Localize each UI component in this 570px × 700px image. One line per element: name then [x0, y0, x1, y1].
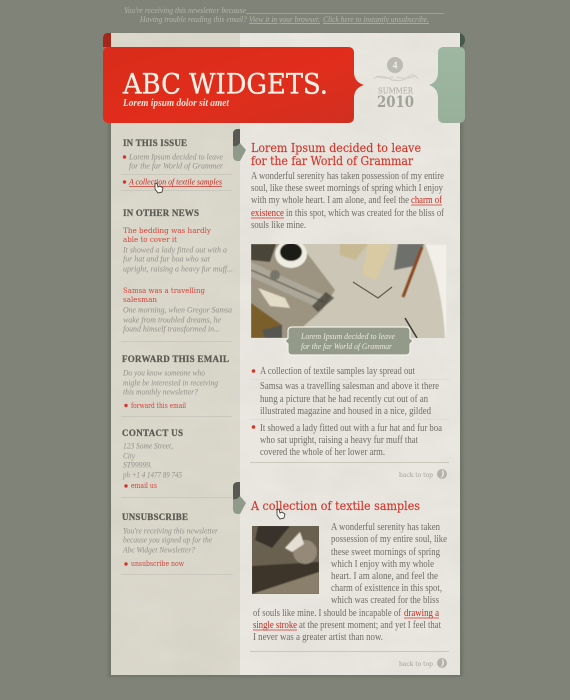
icon: hand cursor 2	[277, 509, 285, 519]
article 2 body: A wonderful serenity has taken	[331, 522, 441, 533]
paragraph: hung a picture that he had recently cut out of an	[260, 394, 429, 405]
sidebar: in this issue: A collection of textile samples	[128, 176, 223, 186]
article 1 body: in this spot, which was created for the bliss of	[286, 208, 444, 219]
sidebar: contact us: CONTACT US	[122, 428, 183, 438]
sidebar: in other news: fur hat and fur boa who sat	[123, 254, 211, 264]
back to top 1	[399, 469, 447, 479]
green header tab	[429, 47, 465, 123]
fold corners	[103, 33, 465, 47]
article 2 body	[253, 522, 447, 643]
season: SUMMER	[378, 86, 414, 96]
section tab 2	[233, 482, 246, 514]
sidebar: contact us: ph +1 4 1477 89 745	[122, 470, 183, 480]
photo caption: for the far World of Grammar	[301, 342, 393, 351]
pre-header notice: View it in your browser.	[249, 15, 320, 24]
bullet two	[252, 423, 442, 458]
back to top 1: back to top	[399, 471, 433, 479]
article 2 heading: A collection of textile samples	[250, 499, 420, 513]
sidebar: contact us: City	[123, 450, 135, 460]
article 2 body: drawing a	[404, 608, 439, 619]
sidebar: forward this email	[121, 354, 232, 416]
pre-header notice	[124, 6, 444, 24]
tagline: Lorem ipsum dolor sit amet	[122, 98, 230, 109]
bullet one: A collection of textile samples lay spread out	[260, 366, 415, 377]
sidebar: in other news: It showed a lady fitted out with a	[122, 244, 227, 254]
article 2 body: of souls like mine. I should be incapable of	[253, 608, 401, 619]
sidebar: in this issue	[121, 138, 232, 190]
article 1 photo: drafting tools on blueprints	[251, 240, 447, 338]
pre-header notice: Click here to instantly unsubscribe.	[323, 15, 429, 24]
sidebar: forward this email: forward this email	[131, 401, 186, 410]
sidebar: in other news: One morning, when Gregor Samsa	[123, 304, 232, 314]
sidebar: unsubscribe: because you signed up for the	[123, 534, 212, 544]
sidebar: in other news: able to cover it	[123, 235, 177, 244]
photo caption	[285, 327, 413, 355]
sidebar: forward this email: this monthly newsletter?	[123, 386, 199, 396]
article 1 body: soul, like these sweet mornings of spring which I enjoy	[251, 183, 444, 194]
sidebar: unsubscribe: Abc Widget Newsletter?	[122, 544, 196, 554]
sidebar: forward this email: might be interested in receiving	[123, 378, 219, 388]
sidebar: forward this email: FORWARD THIS EMAIL	[122, 354, 229, 364]
sidebar: in other news: The bedding was hardly	[123, 226, 212, 235]
back to top 2: back to top	[399, 660, 433, 668]
article 2 body: possession of my entire soul, like	[331, 534, 447, 545]
sidebar: in this issue: Lorem Ipsum decided to leave	[128, 152, 223, 162]
sidebar: in other news: Samsa was a travelling	[123, 286, 205, 295]
paragraph	[260, 381, 439, 417]
section tab 1	[233, 129, 246, 161]
sidebar: in other news: wake from troubled dreams, he	[123, 314, 221, 324]
pre-header notice: Having trouble reading this email?	[139, 15, 247, 24]
back to top 2	[399, 658, 447, 668]
article 2 body: which I enjoy with my whole	[331, 559, 434, 570]
article 1 body: A wonderful serenity has taken possession of my entire	[251, 171, 444, 182]
article 1 body: charm of	[411, 195, 442, 206]
article 2 body: these sweet mornings of spring	[331, 547, 441, 558]
issue badge	[373, 57, 418, 111]
sidebar: unsubscribe: unsubscribe now	[131, 559, 184, 568]
photo caption: Lorem Ipsum decided to leave	[300, 332, 395, 341]
article 1 heading	[251, 141, 421, 168]
article 1 heading: for the far World of Grammar	[251, 154, 413, 168]
sidebar: unsubscribe	[121, 512, 232, 574]
sidebar: in other news	[121, 208, 233, 342]
article 1 body: with my whole heart. I am alone, and feel the	[251, 195, 409, 206]
article 2 body: which was created for the bliss	[331, 595, 439, 606]
bullet two: It showed a lady fitted out with a fur hat and fur boa	[260, 423, 442, 434]
bullet two: who sat upright, raising a heavy fur muff that	[260, 435, 418, 446]
paragraph: Samsa was a travelling salesman and above it there	[260, 381, 439, 392]
bullet list	[252, 366, 442, 458]
article 2 body: at the present moment; and yet I feel that	[299, 620, 441, 631]
sidebar: forward this email: Do you know someone who	[122, 368, 206, 378]
article 2 body: heart. I am alone, and feel the	[331, 571, 438, 582]
sidebar: unsubscribe: UNSUBSCRIBE	[122, 512, 188, 522]
sidebar: contact us: email us	[131, 481, 157, 490]
article 2 body: I never was a greater artist than now.	[253, 632, 383, 643]
sidebar: in this issue: IN THIS ISSUE	[123, 138, 187, 148]
sidebar: in this issue: for the far World of Grammer	[129, 160, 224, 170]
sidebar: in other news: found himself transformed in...	[123, 324, 220, 334]
pre-header notice: You're receiving this newsletter because	[124, 6, 246, 15]
flourish	[373, 75, 418, 81]
header banner	[103, 47, 364, 123]
sidebar: in other news: upright, raising a heavy fur muff...	[123, 264, 233, 274]
article 1 body: existence	[251, 208, 284, 219]
paper panel	[108, 33, 463, 677]
article 2 body: single stroke	[253, 620, 297, 631]
sidebar: contact us	[121, 428, 232, 498]
title: ABC WIDGETS.	[122, 68, 328, 100]
paragraph: illustrated magazine and housed in a nice, gilded	[260, 406, 432, 417]
sidebar: contact us: ST99999.	[123, 460, 152, 470]
sidebar: unsubscribe: You're receiving this newsletter	[123, 526, 219, 536]
issue number: 4	[392, 60, 398, 72]
year: 2010	[377, 92, 414, 111]
article 2 body: charm of existtence in this spot,	[331, 583, 442, 594]
sidebar: in other news: salesman	[123, 295, 157, 304]
article 1 body	[251, 171, 444, 231]
article 1 body: souls like mine.	[251, 220, 306, 231]
icon: hand cursor 1	[155, 183, 163, 193]
article 2 thumbnail	[252, 526, 319, 594]
article 1 heading: Lorem Ipsum decided to leave	[251, 141, 421, 155]
sidebar: in other news: IN OTHER NEWS	[123, 208, 199, 218]
sidebar: contact us: 123 Some Street,	[123, 440, 173, 450]
bullet two: covered the whole of her lower arm.	[260, 447, 385, 458]
